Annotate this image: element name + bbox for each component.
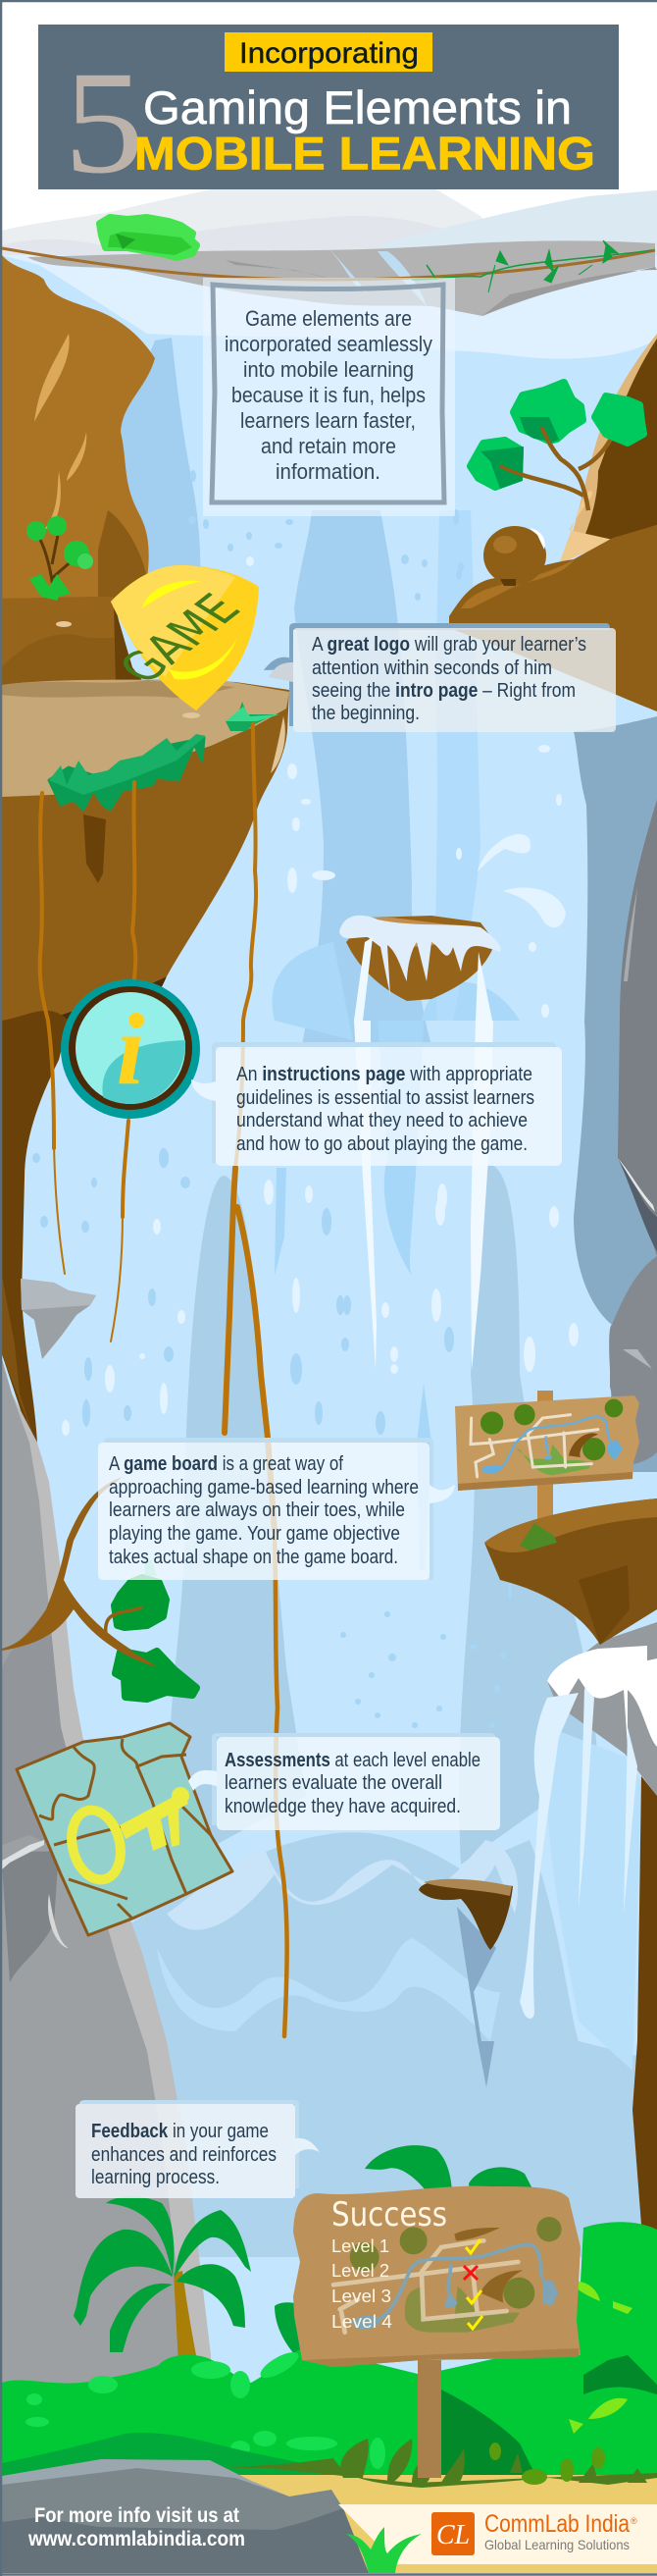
- text block: instructions: guidelines is essential to assist learners: [236, 1087, 534, 1109]
- text block: game board: learners are always on their toes, while: [109, 1499, 405, 1521]
- sand: [235, 2475, 657, 2573]
- callout: instructions page: [191, 1042, 562, 1166]
- panel: intro frame: [203, 278, 455, 516]
- text block: intro: [225, 306, 432, 484]
- floating ice rock: [339, 916, 501, 1021]
- icon: small tree on cliff: [26, 516, 93, 601]
- text block: game board: approaching game-based learning where: [109, 1477, 419, 1498]
- icon: grass tuft: [346, 2527, 422, 2573]
- text block: feedback: enhances and reinforces: [91, 2144, 277, 2166]
- text block: intro: because it is fun, helps: [231, 383, 426, 407]
- icon: right tree: [471, 383, 643, 510]
- text block: intro: information.: [276, 459, 380, 484]
- text: footer call to action: [27, 2504, 245, 2550]
- panel: company logo strip: [338, 2504, 657, 2573]
- branch with foliage: [2, 1477, 196, 1699]
- text block: feedback: Feedback in your game: [91, 2121, 269, 2142]
- numeral five: 5: [64, 41, 144, 204]
- text block: assessments: Assessments at each level enable: [225, 1750, 480, 1771]
- icon: puzzle with key: [17, 1723, 232, 1935]
- text block: assessments: knowledge they have acquired.: [225, 1796, 461, 1817]
- text: i: i: [117, 993, 145, 1106]
- dark bush: [431, 2390, 539, 2483]
- left grey ledge: [21, 1279, 96, 1359]
- right grey-blue rock wall: [574, 716, 657, 1472]
- text block: assessments: [225, 1750, 480, 1817]
- text block: feedback: [91, 2121, 277, 2188]
- rope with vine: [2, 240, 655, 292]
- icon: info badge: [61, 979, 200, 1119]
- text block: intro: into mobile learning: [243, 357, 414, 382]
- falling water streams: [354, 1021, 493, 1371]
- text block: intro: learners learn faster,: [240, 408, 416, 433]
- right upper cliff: [449, 334, 657, 711]
- title line two: MOBILE LEARNING: [134, 128, 595, 180]
- foliage behind sign: [275, 2145, 537, 2365]
- text block: logo: A great logo will grab your learner’s: [312, 634, 586, 656]
- icon: result marks: [464, 2239, 482, 2329]
- text: levels: Level 4: [331, 2312, 392, 2332]
- text: copyright mark: ®: [631, 2516, 637, 2526]
- text: levels: [331, 2236, 392, 2332]
- text: sign title: Success: [331, 2195, 447, 2234]
- heading tag: Incorporating: [239, 37, 419, 70]
- icon: bush on rope: [100, 218, 196, 257]
- text block: intro: Game elements are: [245, 306, 412, 331]
- callout: great logo: [264, 623, 616, 732]
- icon: game board signpost: [455, 1391, 639, 1538]
- text block: instructions: [236, 1064, 534, 1155]
- jungle bottom scene: [2, 2145, 657, 2573]
- text block: game board: takes actual shape on the game board.: [109, 1547, 398, 1568]
- text block: instructions: understand what they need to achieve: [236, 1110, 528, 1131]
- ice falls on the right: [520, 1646, 657, 2019]
- text: footer call to action: www.commlabindia.com: [27, 2528, 245, 2550]
- ledge with grass and overhang: [2, 679, 289, 1040]
- bright leaves: [569, 2282, 632, 2434]
- text: levels: Level 2: [331, 2261, 389, 2281]
- text block: game board: playing the game. Your game objective: [109, 1523, 400, 1545]
- callout: assessments: [188, 1733, 500, 1830]
- dark ground band: [2, 2433, 373, 2478]
- mountain and grey cliff behind rope: [27, 240, 657, 316]
- icon: CL mark: CL: [436, 2520, 470, 2550]
- icon: success signpost: [293, 2186, 581, 2478]
- text block: logo: attention within seconds of him: [312, 657, 552, 679]
- text: levels: Level 1: [331, 2236, 389, 2256]
- text block: game board: A game board is a great way of: [109, 1453, 343, 1475]
- text block: intro: incorporated seamlessly: [225, 332, 432, 356]
- left dark wall: [2, 1011, 69, 1447]
- text block: logo: seeing the intro page – Right from: [312, 680, 576, 702]
- text block: feedback: learning process.: [91, 2167, 220, 2188]
- heading tag: [225, 32, 432, 72]
- footer grey rock: [2, 2459, 369, 2573]
- icon: GAME shield logo: [107, 565, 259, 710]
- text block: game board: [109, 1453, 419, 1568]
- icon: CL mark: [431, 2512, 475, 2555]
- undergrowth plants: [226, 2439, 657, 2488]
- text block: instructions: and how to go about playing the game.: [236, 1133, 528, 1155]
- water droplets: [32, 470, 512, 1869]
- main bush: [2, 2222, 657, 2483]
- callout: game board: [98, 1438, 455, 1580]
- text: company name: CommLab India: [484, 2510, 630, 2538]
- right mid ledge: [484, 1498, 657, 2237]
- panel: feedback callout: [76, 2100, 320, 2198]
- bush highlights: [25, 2347, 385, 2469]
- icon: palm tree: [74, 2196, 251, 2365]
- light droplets: [62, 556, 579, 1436]
- left upper cliff: [2, 255, 155, 687]
- text block: logo: the beginning.: [312, 703, 420, 724]
- title line one: Gaming Elements in: [143, 81, 572, 133]
- small hanging rock: [419, 1879, 513, 1950]
- vines: [40, 724, 287, 2036]
- text block: logo: [312, 634, 586, 724]
- text block: assessments: learners evaluate the overall: [225, 1772, 442, 1794]
- text: footer call to action: For more info visit us at: [34, 2504, 239, 2527]
- text block: intro: and retain more: [261, 434, 396, 458]
- icon: round boulder: [483, 526, 546, 586]
- header banner: [38, 25, 619, 204]
- text: GAME: GAME: [107, 585, 253, 692]
- text block: instructions: An instructions page with appropriate: [236, 1064, 532, 1085]
- text: levels: Level 3: [331, 2287, 391, 2306]
- left grey rock wall: [2, 1359, 211, 2478]
- text: tagline: Global Learning Solutions: [484, 2537, 630, 2552]
